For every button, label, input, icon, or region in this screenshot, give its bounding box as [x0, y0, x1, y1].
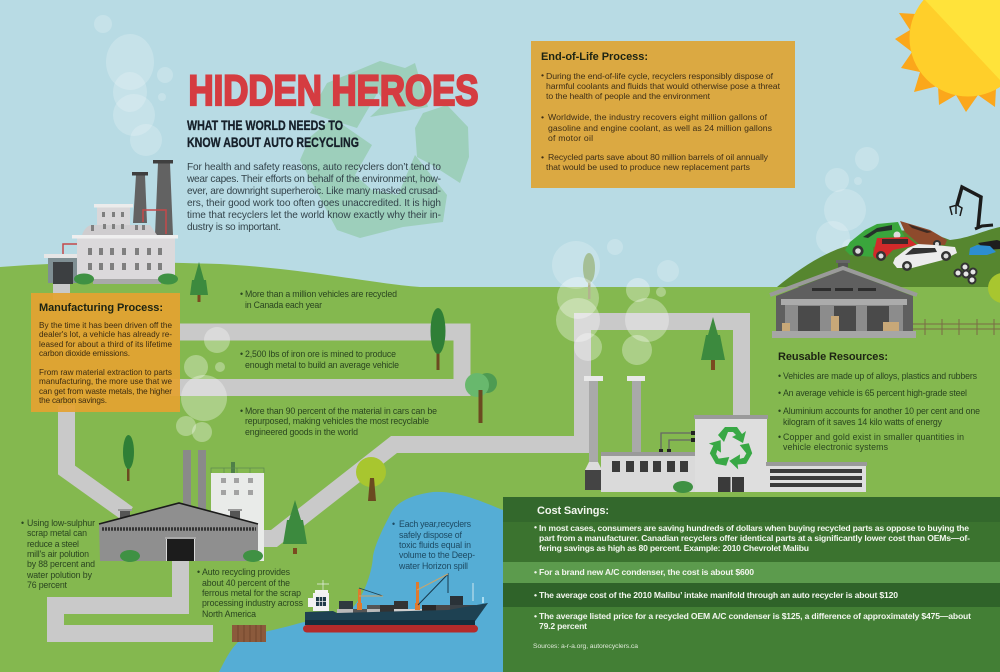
text: cost savings bullets: In most cases, consumers are saving hundreds of dollars when buying recycled parts as oppose to buying the: [539, 523, 969, 533]
text: end-of-life bullets: Worldwide, the industry recovers eight million gallons of: [548, 112, 768, 122]
text: vehicles recycled: More than a million vehicles are recycled: [245, 289, 397, 299]
intro paragraph: time that recyclers let the world know exactly why their in-: [187, 210, 441, 221]
smoke above junkyard hill: [816, 147, 879, 255]
text: ferrous metal: about 40 percent of the: [202, 578, 290, 588]
title: HIDDEN HEROES: [188, 68, 478, 115]
text: low-sulphur scrap: by 88 percent and: [27, 559, 95, 569]
middle factory and warehouse: [99, 450, 264, 562]
text: low-sulphur scrap: reduce a steel: [27, 539, 79, 549]
text: reusable resources bullets: [778, 371, 980, 452]
panel: reusable resources: [778, 351, 980, 452]
text: reusable resources bullets: Vehicles are made up of alloys, plastics and rubbers: [783, 371, 978, 381]
icon: pale recycling symbol in sky: [300, 61, 469, 238]
intro paragraph: [186, 162, 441, 233]
text: iron ore: 2,500 lbs of iron ore is mined to produce: [245, 349, 396, 359]
text: toxic fluids: •: [392, 519, 395, 529]
junkyard hill: [777, 227, 1000, 287]
text: manufacturing body: can get from waste metals, the higher: [39, 387, 172, 396]
text: vehicles recycled: in Canada each year: [245, 300, 322, 310]
text: cost savings bullets: •: [534, 522, 537, 532]
text: end-of-life bullets: of motor oil: [548, 133, 593, 143]
text: ferrous metal: processing industry across: [202, 598, 304, 608]
panel: manufacturing process: [31, 293, 180, 412]
bush at right edge: [988, 273, 1000, 303]
text: cost savings bullets: [534, 522, 971, 631]
text: vehicles recycled: [240, 289, 397, 310]
text: iron ore: [240, 349, 399, 370]
text: iron ore: •: [240, 349, 243, 359]
crane claw: [950, 187, 993, 229]
scrapped cars: [845, 221, 1000, 271]
text: reusable resources bullets: •: [778, 388, 781, 398]
text: material repurposed: More than 90 percent of the material in cars can be: [245, 406, 437, 416]
text: iron ore: enough metal to build an average vehicle: [245, 360, 399, 370]
text: manufacturing body: manufacturing, the more use that we: [39, 377, 172, 386]
text: cost savings bullets: 79.2 percent: [539, 621, 587, 631]
text: reusable resources bullets: An average vehicle is 65 percent high-grade steel: [783, 388, 967, 398]
tree: pine by warehouse: [283, 500, 307, 554]
intro paragraph: ever, are downright superheroic. Like many masked crusad-: [187, 186, 441, 197]
icon: recycling symbol on plant: [705, 427, 756, 471]
text: manufacturing body: dealer's lot, a vehicle has already re-: [39, 330, 172, 339]
text: low-sulphur scrap: water polution by: [26, 570, 93, 580]
sky background: [0, 0, 1000, 300]
panel: cost savings: [503, 497, 1000, 672]
subtitle: [187, 118, 359, 150]
text: material repurposed: repurposed, making vehicles the most recyclable: [245, 416, 429, 426]
intro paragraph: ers, their good work too often goes unaccredited. It is high: [187, 198, 441, 209]
white car: [893, 244, 957, 271]
text: cost savings bullets: •: [534, 611, 537, 621]
text: end-of-life bullets: •: [541, 152, 544, 162]
text: ferrous metal: •: [197, 567, 200, 577]
text: vehicles recycled: •: [240, 289, 243, 299]
text: ferrous metal: ferrous metal for the scrap: [202, 588, 301, 598]
cargo ship: [303, 574, 488, 632]
subtitle: WHAT THE WORLD NEEDS TO: [187, 118, 343, 133]
heading: manufacturing process: Manufacturing Process:: [39, 302, 163, 314]
text: material repurposed: •: [240, 406, 243, 416]
blue and black cars: [969, 240, 1000, 255]
text: toxic fluids: water Horizon spill: [398, 561, 468, 571]
text: manufacturing body: leased for about a third of its lifetime: [39, 340, 172, 349]
tree: pine near title: [190, 262, 208, 302]
tree: tall oval centre: [430, 308, 446, 370]
text: reusable resources bullets: Copper and gold exist in smaller quantities in: [783, 432, 964, 442]
text: end-of-life bullets: During the end-of-life cycle, recyclers responsibly dispose of: [546, 71, 774, 81]
text: ferrous metal: North America: [202, 609, 256, 619]
text: end-of-life bullets: gasoline and engine coolant, as well as 24 million gallons: [548, 123, 773, 133]
text: material repurposed: engineered goods in the world: [245, 427, 358, 437]
text: end-of-life bullets: •: [541, 70, 544, 80]
tree: pale oval: [583, 253, 595, 299]
text: low-sulphur scrap: 76 percent: [27, 580, 68, 590]
recycling plant: [584, 376, 867, 493]
tree: round teal: [465, 373, 497, 423]
smoke over mid road: [176, 327, 230, 442]
text: sources: Sources: a-r-a.org, autorecyclers.ca: [533, 643, 638, 650]
text: manufacturing body: From raw material extraction to parts: [39, 368, 172, 377]
text: end-of-life bullets: harmful coolants and fluids that would otherwise pose a threat: [546, 81, 781, 91]
text: cost savings bullets: The average listed price for a recycled OEM A/C condenser is $125, a difference of approximately $475—about: [539, 611, 971, 621]
text: low-sulphur scrap: scrap metal can: [27, 528, 87, 538]
heading: cost savings: Cost Savings:: [537, 505, 609, 517]
heading: reusable resources: Reusable Resources:: [778, 351, 888, 363]
text: ferrous metal: [197, 567, 304, 619]
tyre pile: [954, 264, 976, 284]
smoke over right road: [552, 239, 679, 365]
subtitle: KNOW ABOUT AUTO RECYCLING: [187, 135, 359, 150]
text: toxic fluids: safely dispose of: [399, 530, 463, 540]
text: material repurposed: [240, 406, 437, 437]
text: reusable resources bullets: vehicle electronic systems: [783, 442, 889, 452]
text: end-of-life bullets: [541, 70, 781, 172]
water: [219, 492, 510, 672]
text: cost savings bullets: •: [534, 590, 537, 600]
tree: pine by upper road: [701, 317, 725, 370]
text: manufacturing body: [39, 321, 172, 405]
text: cost savings bullets: The average cost of the 2010 Malibu’ intake manifold through an auto recycler is about $120: [539, 590, 898, 600]
green car: [845, 222, 905, 257]
text: end-of-life bullets: that would be used to produce new replacement parts: [546, 162, 751, 172]
intro paragraph: wear capes. Their efforts on behalf of the environment, how-: [186, 174, 441, 185]
icon: sun: [895, 0, 1000, 112]
red car: [873, 237, 917, 261]
brown car: [900, 221, 947, 248]
text: low-sulphur scrap: [21, 518, 95, 590]
tree: yellow round: [356, 457, 386, 501]
heading: end-of-life process: End-of-Life Process:: [541, 51, 648, 63]
text: reusable resources bullets: •: [778, 371, 781, 381]
text: reusable resources bullets: •: [778, 406, 781, 416]
smoke above top-left factory: [94, 15, 173, 156]
text: manufacturing body: the carbon savings.: [39, 396, 107, 405]
text: cost savings bullets: fering savings as high as 80 percent. Example: 2010 Chevrolet Malibu: [539, 543, 809, 553]
text: end-of-life bullets: •: [541, 112, 544, 122]
text: end-of-life bullets: to the health of people and the environment: [546, 91, 711, 101]
text: manufacturing body: By the time it has been driven off the: [39, 321, 172, 330]
tree: oval left: [123, 435, 134, 481]
junkyard warehouse: [770, 260, 917, 338]
text: end-of-life bullets: Recycled parts save about 80 million barrels of oil annually: [548, 152, 769, 162]
green ground: [0, 262, 1000, 672]
text: reusable resources bullets: •: [778, 432, 781, 442]
text: low-sulphur scrap: Using low-sulphur: [27, 518, 95, 528]
text: low-sulphur scrap: •: [21, 518, 24, 528]
intro paragraph: dustry is so important.: [187, 222, 281, 233]
fence: [913, 319, 1000, 335]
text: cost savings bullets: For a brand new A/C condenser, the cost is about $600: [539, 567, 754, 577]
dock: [232, 625, 266, 642]
text: ferrous metal: Auto recycling provides: [202, 567, 291, 577]
text: reusable resources bullets: Aluminium accounts for another 10 per cent and one: [783, 406, 980, 416]
text: toxic fluids: volume to the Deep-: [399, 550, 475, 560]
text: toxic fluids: Each year,recyclers: [399, 519, 472, 529]
text: cost savings bullets: part from a manufacturer. Canadian recyclers offer identical parts at a significantly lower cost than OEMs—of-: [539, 533, 970, 543]
intro paragraph: For health and safety reasons, auto recyclers don’t tend to: [187, 162, 441, 173]
text: reusable resources bullets: kilogram of it saves 14 kilo watts of energy: [783, 417, 943, 427]
text: manufacturing body: carbon dioxide emissions.: [39, 349, 130, 358]
text: cost savings bullets: •: [534, 567, 537, 577]
text: toxic fluids: toxic fluids equal in: [399, 540, 471, 550]
recycling route road: [56, 284, 742, 634]
text: low-sulphur scrap: mill's air polution: [27, 549, 89, 559]
panel: end-of-life process: [531, 41, 795, 188]
top-left factory: [44, 160, 178, 284]
text: toxic fluids: [392, 519, 475, 571]
